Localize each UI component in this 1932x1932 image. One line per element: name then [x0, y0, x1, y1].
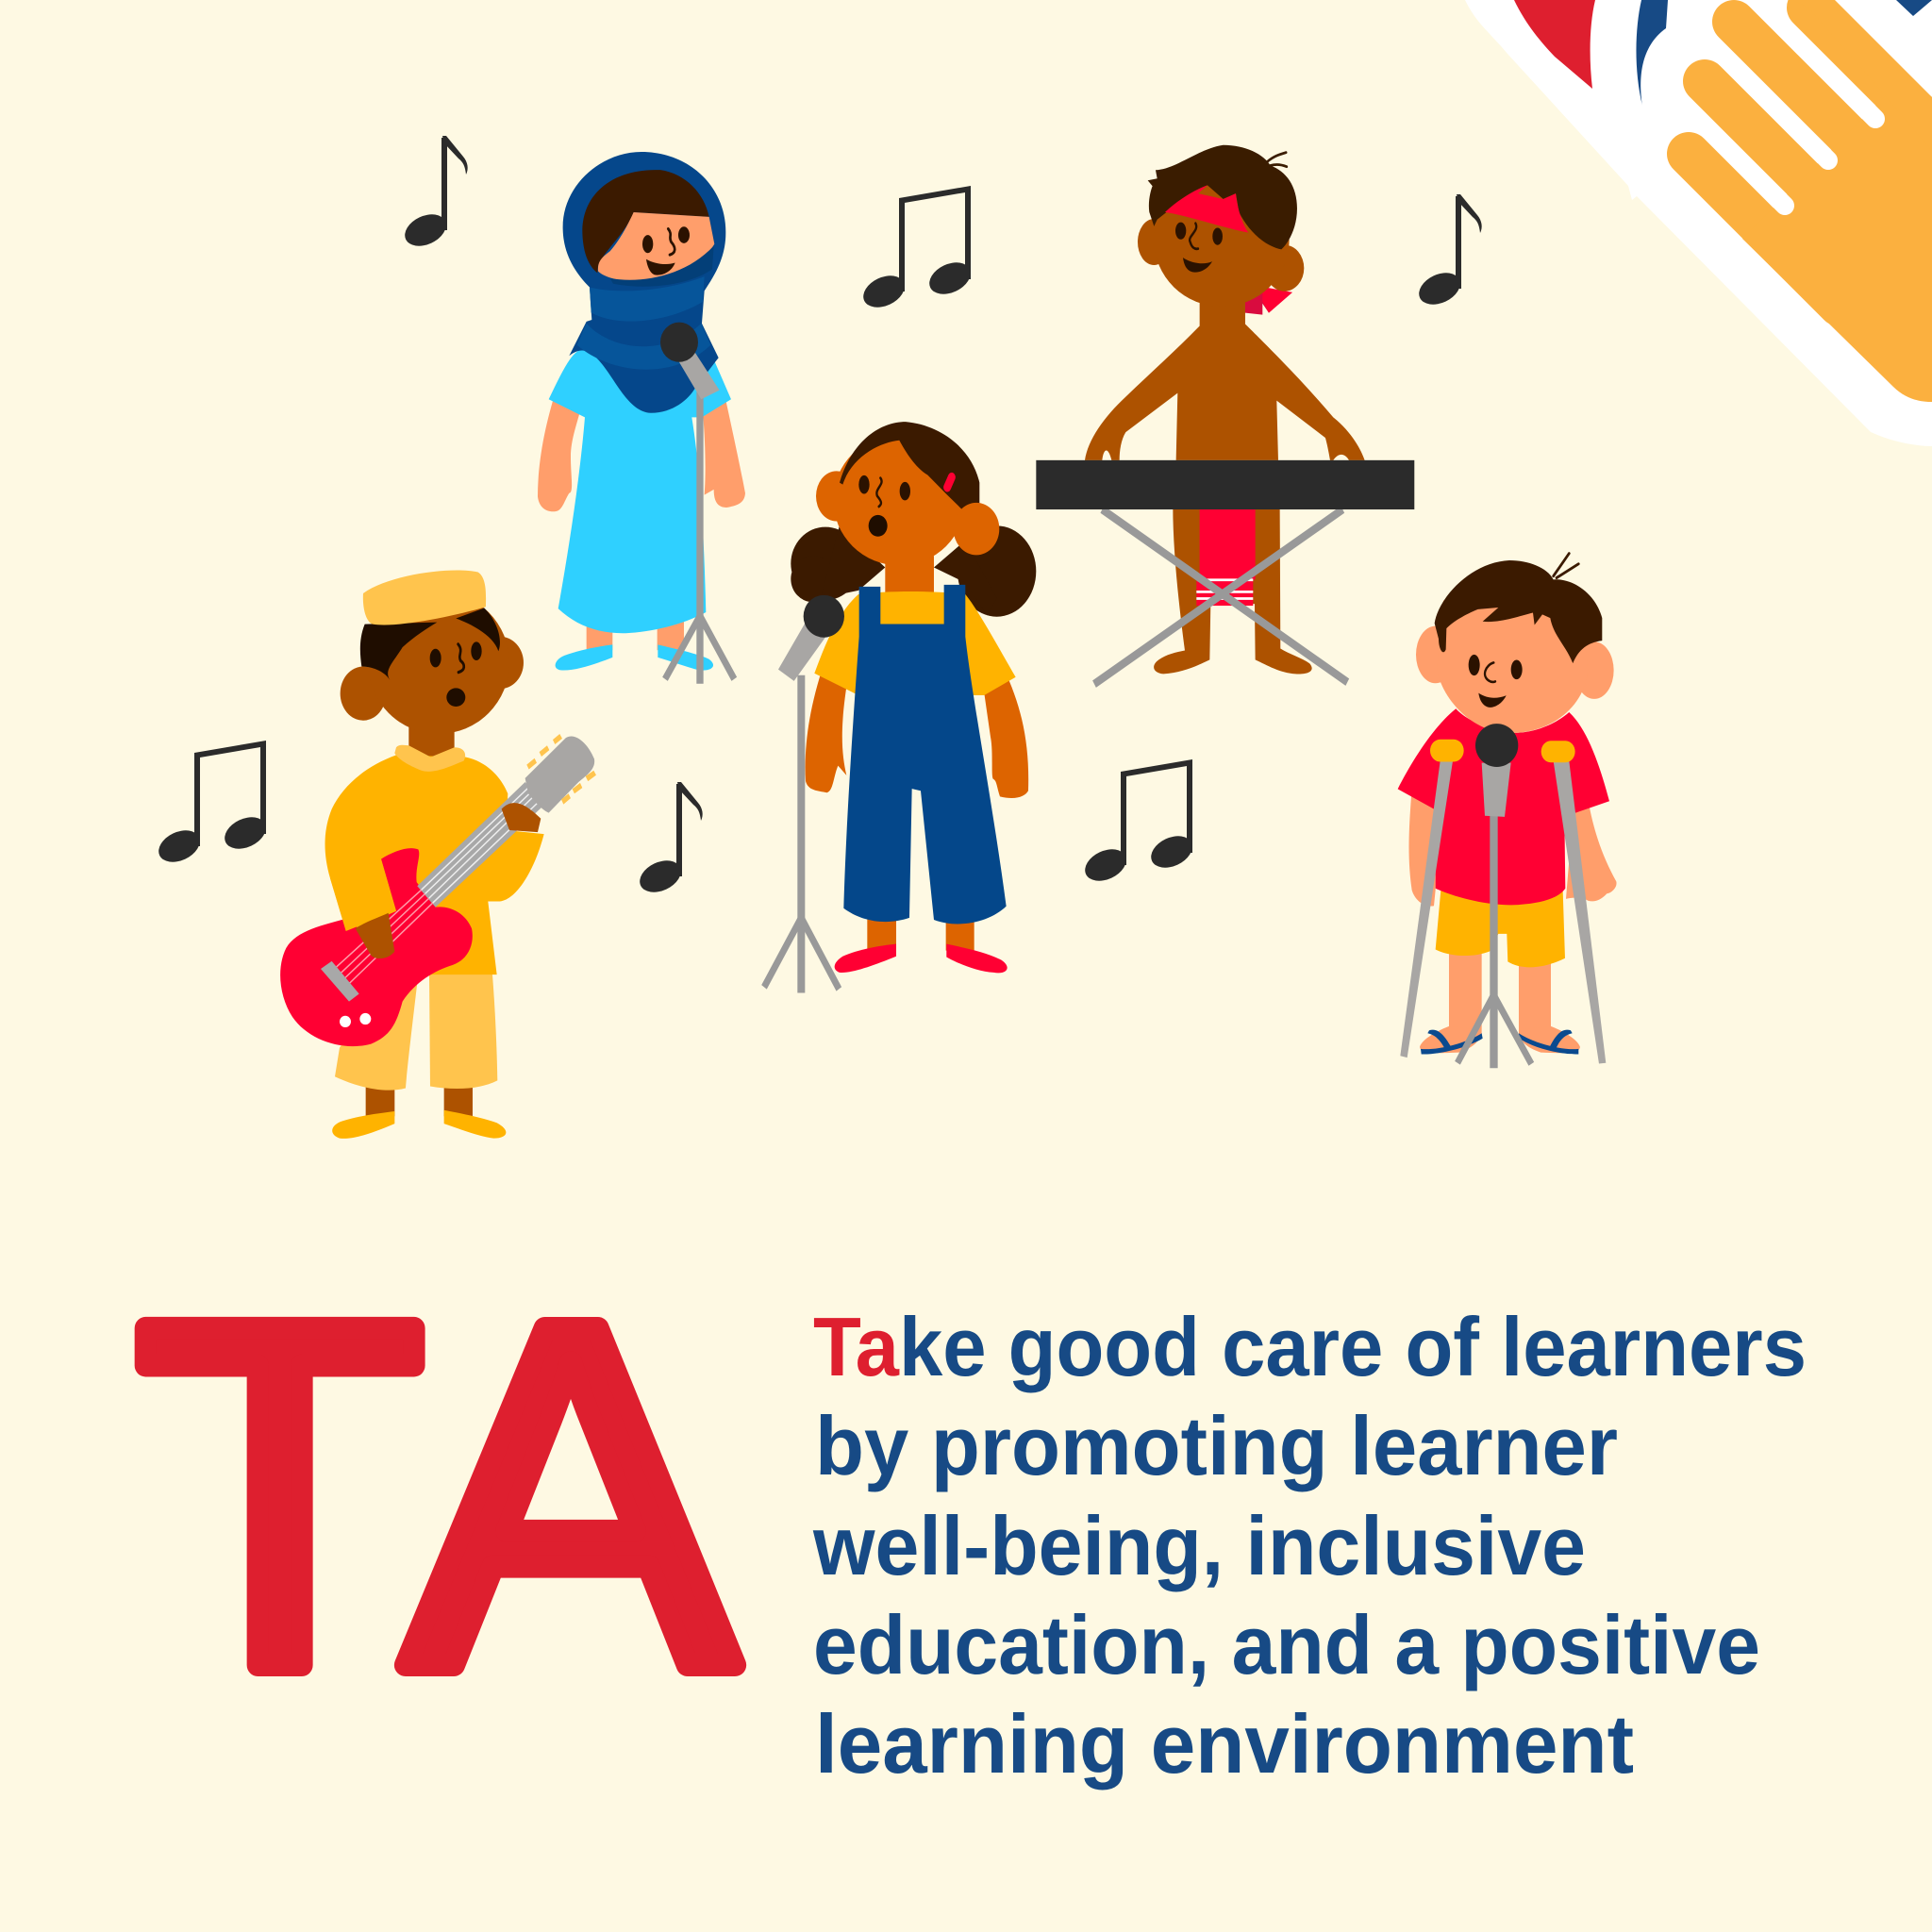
description text: well-being, inclusive	[812, 1499, 1586, 1592]
large letters TA	[135, 1222, 739, 1770]
double music note center right	[1080, 759, 1197, 887]
music note top left	[400, 136, 468, 252]
boy in yellow playing red guitar	[280, 571, 596, 1139]
boy playing keyboard	[1036, 145, 1414, 684]
boy with crutches at microphone	[1398, 554, 1617, 1068]
description text: education, and a positive	[813, 1598, 1760, 1691]
girl in hijab singing at microphone	[538, 152, 745, 684]
double music note left	[154, 741, 271, 868]
description text: learning environment	[815, 1697, 1634, 1790]
large letters TA: T	[135, 1223, 425, 1770]
double music note top middle	[858, 186, 975, 313]
girl in blue overalls singing at microphone	[764, 422, 1036, 993]
corner hand icon	[1465, 0, 1932, 446]
music note center left	[635, 782, 703, 898]
description text: by promoting learner	[815, 1399, 1618, 1492]
large letters TA: A	[405, 1222, 739, 1769]
description text	[812, 1300, 1807, 1790]
music note top right	[1414, 194, 1482, 310]
description text: Take good care of learners	[813, 1300, 1807, 1393]
